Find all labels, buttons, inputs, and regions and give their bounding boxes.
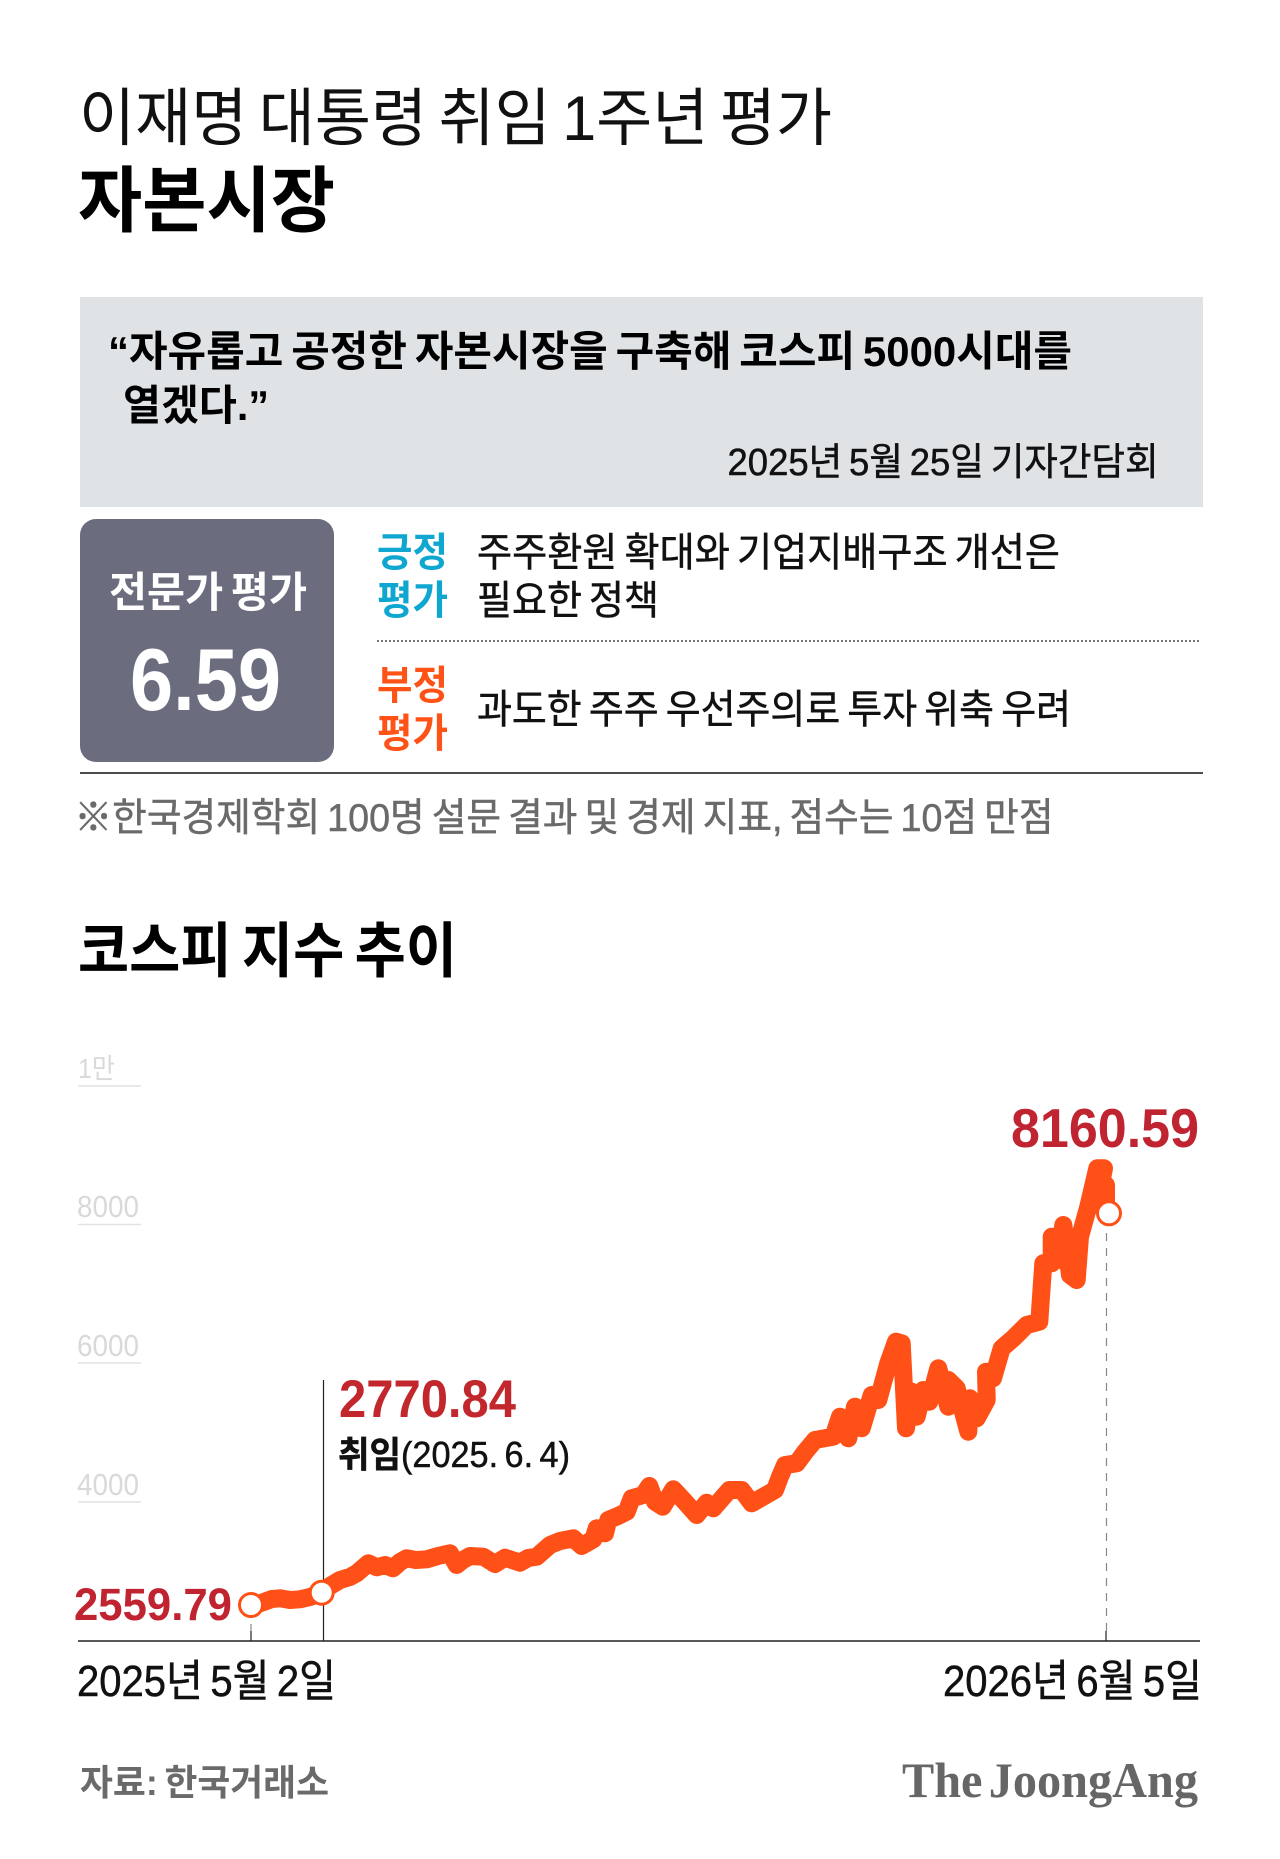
positive label: 긍정 xyxy=(377,531,448,575)
inauguration marker line xyxy=(322,1380,324,1641)
score label: 전문가 평가 xyxy=(109,569,307,616)
start date: 2025년 5월 2일 xyxy=(77,1657,336,1706)
end date: 2026년 6월 5일 xyxy=(943,1657,1202,1706)
score value: 6.59 xyxy=(130,630,281,729)
x axis xyxy=(78,1631,1200,1641)
quote text line 2: 열겠다.” xyxy=(123,382,269,429)
end date dashed line xyxy=(1106,1233,1108,1631)
y axis labels: 6000 xyxy=(77,1328,139,1363)
index line xyxy=(251,1168,1106,1605)
quote source: 2025년 5월 25일 기자간담회 xyxy=(728,442,1158,484)
panel: negative evaluation xyxy=(377,664,1071,756)
start point marker xyxy=(240,1594,262,1616)
start value: 2559.79 xyxy=(74,1579,232,1630)
title line 2: 자본시장 xyxy=(78,162,335,242)
end point marker xyxy=(1098,1202,1120,1225)
title xyxy=(78,84,832,242)
negative label: 부정 xyxy=(377,664,448,708)
panel: pledge quote xyxy=(80,297,1203,507)
panel: expert score xyxy=(80,519,334,762)
inauguration value: 2770.84 xyxy=(339,1370,516,1429)
chart heading: 코스피 지수 추이 xyxy=(78,918,457,985)
positive text: 주주환원 확대와 기업지배구조 개선은 xyxy=(477,531,1060,575)
y axis labels: 8000 xyxy=(77,1189,139,1224)
title line 1: 이재명 대통령 취임 1주년 평가 xyxy=(79,84,832,154)
positive text line 2: 필요한 정책 xyxy=(477,579,659,623)
end value: 8160.59 xyxy=(1011,1097,1199,1159)
quote text: “자유롭고 공정한 자본시장을 구축해 코스피 5000시대를 xyxy=(108,328,1072,375)
inauguration label: 취임(2025. 6. 4) xyxy=(338,1434,570,1475)
negative text: 과도한 주주 우선주의로 투자 위축 우려 xyxy=(477,688,1071,732)
positive label: 평가 xyxy=(377,579,448,623)
line chart: KOSPI xyxy=(74,1053,1202,1706)
panel: positive evaluation xyxy=(377,531,1060,623)
y axis labels xyxy=(77,1053,139,1502)
logo: The JoongAng: The JoongAng xyxy=(902,1752,1198,1808)
y axis labels: 4000 xyxy=(77,1467,139,1502)
y axis labels: 1만 xyxy=(78,1053,115,1084)
negative label: 평가 xyxy=(377,712,448,756)
source: 자료: 한국거래소 xyxy=(80,1762,329,1803)
survey note: ※한국경제학회 100명 설문 결과 및 경제 지표, 점수는 10점 만점 xyxy=(74,797,1054,840)
inauguration point marker xyxy=(310,1581,333,1604)
